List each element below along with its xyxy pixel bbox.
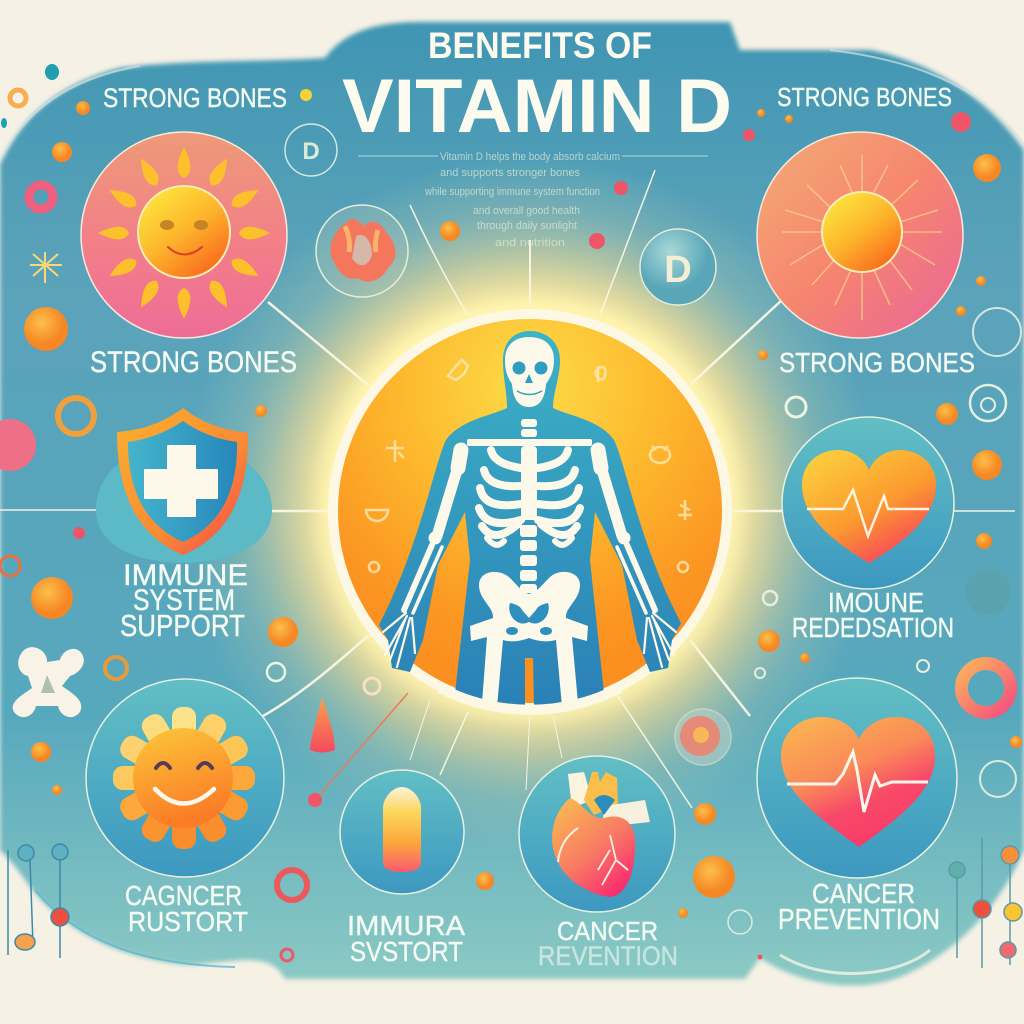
intro text block: while supporting immune system function [424,186,600,198]
pins bottom right [949,838,1022,968]
central circle with skeleton [318,299,742,723]
connector lines [0,170,1015,808]
panel: top-left sun [81,132,287,338]
skeleton bones [467,337,592,707]
title: BENEFITS OF [428,25,652,66]
intro text block: and supports stronger bones [440,167,580,179]
labels: REDEDSATION [792,612,954,643]
labels: PREVENTION [778,904,940,936]
icon: D ball: D [664,249,692,291]
labels [90,82,975,971]
icon: medical cross [145,446,217,516]
labels: SVSTORT [350,936,463,967]
panel: bottom-left sun [86,679,284,877]
labels: SUPPORT [120,608,245,643]
icon: D badge outline: D [302,138,320,165]
panel: bottom-right heart [757,678,957,878]
title [342,25,732,149]
icon: bone [13,647,84,717]
red pointer line [315,693,408,800]
labels: IMMURA [347,910,465,941]
icon: organ bubble [316,205,408,297]
panel: top-right sun [757,132,963,338]
labels: CAGNCER [125,880,242,911]
title: VITAMIN D [342,64,732,149]
pins bottom left [8,844,69,958]
panel: capsule [340,770,464,894]
icon: D ball [640,229,716,305]
intro text block [358,151,708,249]
starburst [30,252,62,283]
icon: glass bubble [675,709,731,765]
labels: IMMUNE [123,559,248,592]
labels: RUSTORT [128,906,248,937]
labels: CANCER [557,916,658,946]
intro text block: Vitamin D helps the body absorb calcium [440,151,620,163]
panel: right heart [782,417,954,589]
panel: anatomical heart [519,756,675,912]
intro text block: and overall good health [473,205,580,217]
faint icons in circle [366,360,692,572]
ribs and arms [383,450,676,667]
labels: STRONG BONES [779,347,975,378]
icon: cone [310,697,335,752]
labels: SYSTEM [133,584,235,617]
labels: STRONG BONES [90,346,297,379]
labels: REVENTION [538,941,678,971]
labels: IMOUNE [828,587,924,618]
intro text block: and nutrition [495,237,565,249]
labels: STRONG BONES [777,82,952,112]
labels: STRONG BONES [103,83,287,113]
labels: CANCER [812,878,915,909]
panel: immune shield [96,408,272,563]
icon: D badge outline [285,124,337,176]
body silhouette [379,331,681,708]
intro text block: through daily sunlight [477,220,577,232]
